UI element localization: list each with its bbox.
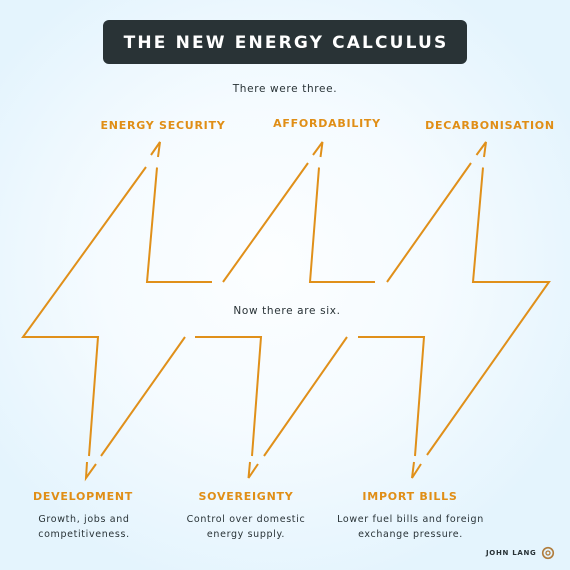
heading: energy security: ENERGY SECURITY [100, 119, 226, 132]
arrow: down to development [86, 337, 185, 478]
heading: development: DEVELOPMENT [33, 490, 133, 503]
heading: decarbonisation: DECARBONISATION [425, 119, 555, 132]
heading: import bills: IMPORT BILLS [362, 490, 458, 503]
description: sovereignty [187, 514, 305, 540]
description: development: competitiveness. [38, 529, 130, 540]
description: import bills: exchange pressure. [358, 529, 463, 540]
arrow: down to sovereignty [195, 337, 347, 478]
description: import bills: Lower fuel bills and foreign [337, 514, 484, 525]
title text: THE NEW ENERGY CALCULUS [124, 33, 448, 53]
description: development: Growth, jobs and [38, 514, 130, 525]
credit: john lang: JOHN LANG [486, 549, 536, 557]
arrow: up to energy security [23, 142, 212, 456]
arrow: up to decarbonisation [387, 142, 549, 455]
heading: affordability: AFFORDABILITY [273, 117, 381, 130]
intro text: there were three: There were three. [233, 83, 337, 95]
description: sovereignty: Control over domestic [187, 514, 305, 525]
title banner [103, 20, 467, 64]
heading: sovereignty: SOVEREIGNTY [198, 490, 294, 503]
intro text: now there are six: Now there are six. [233, 305, 341, 317]
arrow: up to affordability [223, 142, 375, 282]
description: development [38, 514, 130, 540]
icon: author logo [542, 546, 554, 560]
description: import bills [337, 514, 484, 540]
arrow: down to import bills [358, 337, 424, 478]
description: sovereignty: energy supply. [207, 529, 285, 540]
